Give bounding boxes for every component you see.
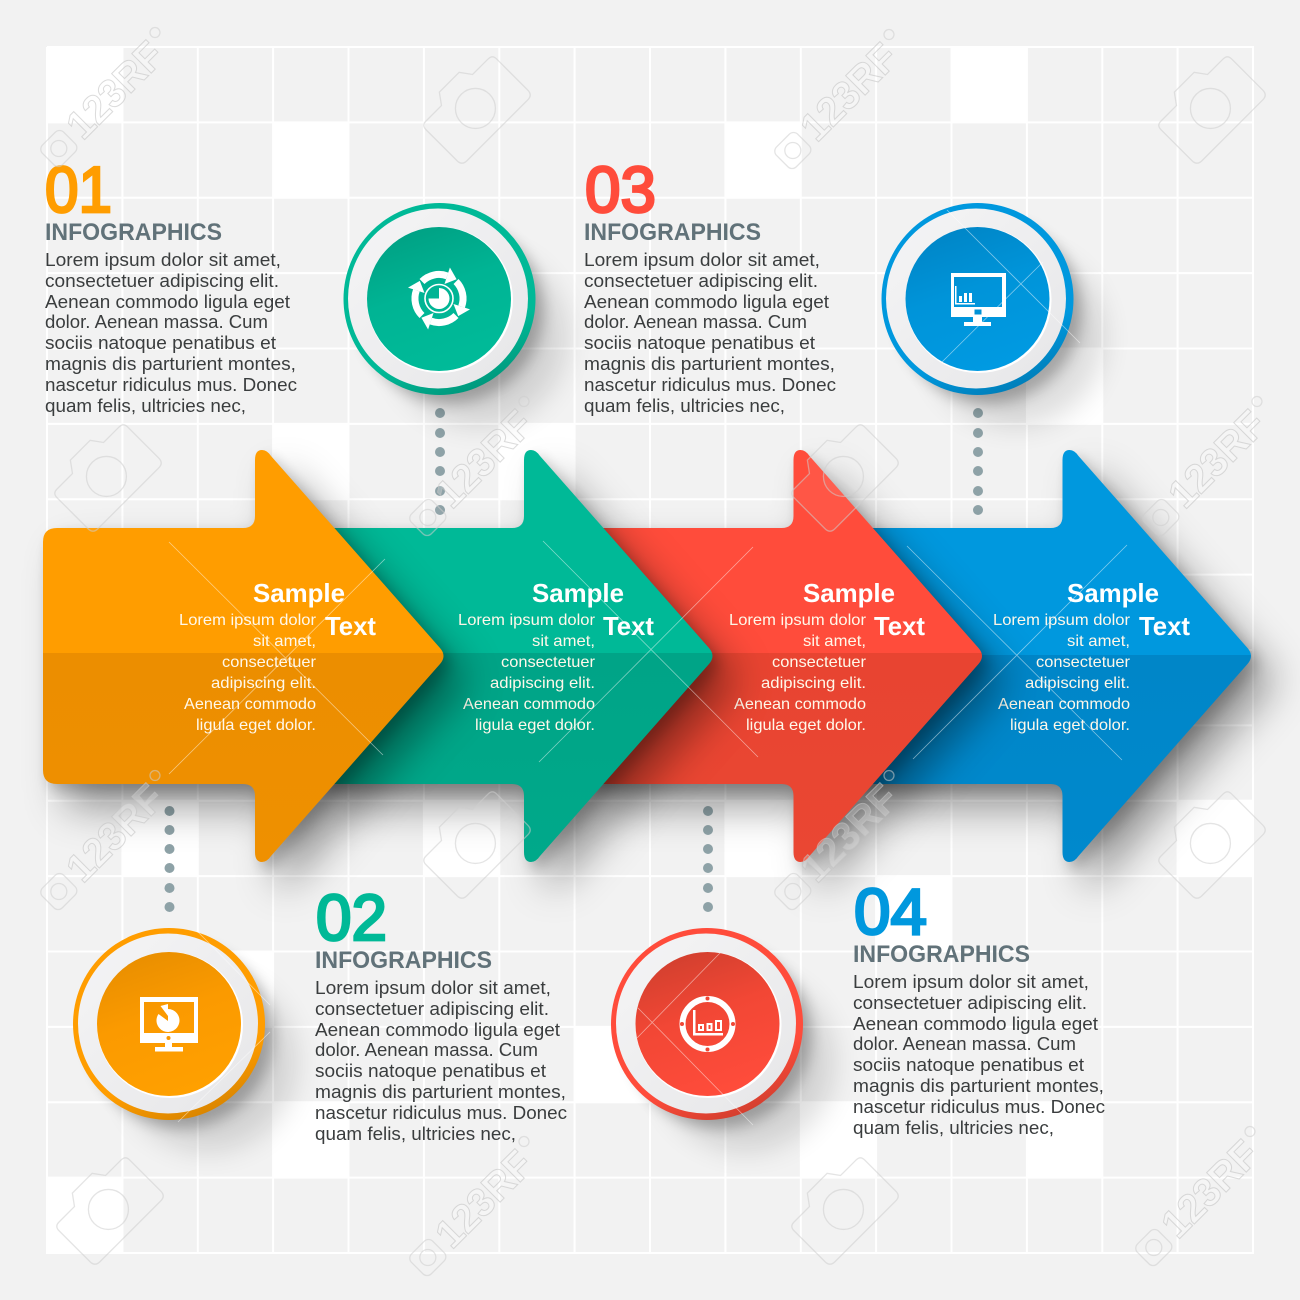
arrow 1 body text: ligula eget dolor. xyxy=(196,717,316,734)
arrow 4: blue xyxy=(850,450,1251,862)
arrow 4 title: Text xyxy=(1139,611,1190,641)
arrow 2 title xyxy=(532,578,654,641)
body text 04: Aenean commodo ligula eget xyxy=(853,1013,1098,1034)
body text 01: dolor. Aenean massa. Cum xyxy=(45,311,268,332)
number 01: 01 xyxy=(45,153,112,226)
arrow 1 body text xyxy=(179,612,317,734)
watermark: 123RF logos: 123RF xyxy=(1153,1132,1268,1247)
arrow 2 title: Sample xyxy=(532,578,624,608)
body text 01: Lorem ipsum dolor sit amet, xyxy=(45,249,281,270)
body text 03: Lorem ipsum dolor sit amet, xyxy=(584,249,820,270)
arrow 2 body text: ligula eget dolor. xyxy=(475,717,595,734)
connector: dotted line 04 xyxy=(703,806,713,912)
arrow 1 title: Text xyxy=(325,611,376,641)
connector: dotted line 01 xyxy=(435,408,445,515)
circle badge: green xyxy=(344,203,566,426)
body text 04: Lorem ipsum dolor sit amet, xyxy=(853,971,1089,992)
arrow 4 title: Sample xyxy=(1067,578,1159,608)
arrow 4 body text xyxy=(993,612,1131,734)
body text 02: dolor. Aenean massa. Cum xyxy=(315,1039,538,1060)
body text 03: quam felis, ultricies nec, xyxy=(584,395,785,416)
body text 03: Aenean commodo ligula eget xyxy=(584,291,829,312)
body text 03: consectetuer adipiscing elit. xyxy=(584,270,818,291)
arrow 4 body text: Lorem ipsum dolor xyxy=(993,612,1131,629)
text block 02 xyxy=(315,881,567,1144)
number 02: 02 xyxy=(316,881,387,954)
body text 01: consectetuer adipiscing elit. xyxy=(45,270,279,291)
body text 02: quam felis, ultricies nec, xyxy=(315,1123,516,1144)
arrow 4 body text: adipiscing elit. xyxy=(1025,675,1130,692)
connector: dotted line 02 xyxy=(164,806,174,912)
body text 04 xyxy=(853,971,1105,1138)
number 03: 03 xyxy=(585,153,656,226)
body text 02 xyxy=(315,977,567,1144)
body text 02: magnis dis parturient montes, xyxy=(315,1081,566,1102)
body text 04: dolor. Aenean massa. Cum xyxy=(853,1033,1076,1054)
body text 02: nascetur ridiculus mus. Donec xyxy=(315,1102,567,1123)
watermark: 123RF logos: 123RF xyxy=(58,776,173,891)
number 04: 04 xyxy=(854,875,927,948)
arrow 3 body text: ligula eget dolor. xyxy=(746,717,866,734)
body text 01 xyxy=(45,249,297,416)
arrow 2 body text: sit amet, xyxy=(532,633,595,650)
text block 03 xyxy=(584,153,836,416)
watermark: 123RF logos: 123RF xyxy=(792,776,907,891)
body text 02: sociis natoque penatibus et xyxy=(315,1060,546,1081)
arrow 2 body text: adipiscing elit. xyxy=(490,675,595,692)
watermark: 123RF logos: 123RF xyxy=(427,1142,542,1257)
arrow 1 body text: Lorem ipsum dolor xyxy=(179,612,317,629)
arrow 1 body text: adipiscing elit. xyxy=(211,675,316,692)
body text 01: Aenean commodo ligula eget xyxy=(45,291,290,312)
circle badge: orange xyxy=(73,928,296,1151)
watermark cross lines on arrows and badges xyxy=(169,210,1127,1125)
body text 04: magnis dis parturient montes, xyxy=(853,1075,1104,1096)
watermark: 123RF logos: 123RF xyxy=(427,402,542,517)
arrow 3: red xyxy=(582,450,982,862)
arrow 2 body text: Aenean commodo xyxy=(463,696,595,713)
icon: target ring with bar chart xyxy=(680,996,735,1052)
body text 04: sociis natoque penatibus et xyxy=(853,1054,1084,1075)
watermark: 123RF logos: 123RF xyxy=(1160,402,1275,517)
arrow 3 body text: consectetuer xyxy=(772,654,867,671)
arrow 3 body text xyxy=(729,612,867,734)
arrow 1: orange xyxy=(43,450,444,862)
arrow 3 body text: adipiscing elit. xyxy=(761,675,866,692)
body text 01: quam felis, ultricies nec, xyxy=(45,395,246,416)
icon: monitor with pie chart xyxy=(140,997,198,1052)
arrow 3 title xyxy=(803,578,925,641)
body text 02: consectetuer adipiscing elit. xyxy=(315,998,549,1019)
arrow 1 body text: consectetuer xyxy=(222,654,317,671)
arrow 2 body text: consectetuer xyxy=(501,654,596,671)
arrow 1 title: Sample xyxy=(253,578,345,608)
body text 03: nascetur ridiculus mus. Donec xyxy=(584,374,836,395)
arrow 4 body text: consectetuer xyxy=(1036,654,1131,671)
watermark: 123RF logos: 123RF xyxy=(792,35,907,150)
text block 01 xyxy=(45,153,297,416)
body text 03: dolor. Aenean massa. Cum xyxy=(584,311,807,332)
arrow 4 body text: Aenean commodo xyxy=(998,696,1130,713)
arrow 4 body text: sit amet, xyxy=(1067,633,1130,650)
body text 03: magnis dis parturient montes, xyxy=(584,353,835,374)
body text 02: Lorem ipsum dolor sit amet, xyxy=(315,977,551,998)
arrow 3 body text: Aenean commodo xyxy=(734,696,866,713)
arrow 4 title xyxy=(1067,578,1190,641)
watermark: 123RF logos: 123RF xyxy=(58,33,173,148)
arrow 4 body text: ligula eget dolor. xyxy=(1010,717,1130,734)
arrow 2 body text: Lorem ipsum dolor xyxy=(458,612,596,629)
arrow 3 body text: sit amet, xyxy=(803,633,866,650)
text block 04 xyxy=(853,875,1105,1138)
body text 02: Aenean commodo ligula eget xyxy=(315,1019,560,1040)
body text 03: sociis natoque penatibus et xyxy=(584,332,815,353)
arrow 3 body text: Lorem ipsum dolor xyxy=(729,612,867,629)
body text 04: consectetuer adipiscing elit. xyxy=(853,992,1087,1013)
heading 03: INFOGRAPHICS xyxy=(584,219,761,246)
arrow 2 body text xyxy=(458,612,596,734)
heading 04: INFOGRAPHICS xyxy=(853,941,1030,968)
body text 01: nascetur ridiculus mus. Donec xyxy=(45,374,297,395)
arrow 1 body text: sit amet, xyxy=(253,633,316,650)
arrow 2: green xyxy=(312,450,712,862)
arrow 3 title: Text xyxy=(874,611,925,641)
body text 03 xyxy=(584,249,836,416)
circle badge: blue xyxy=(882,203,1104,426)
arrow 1 title xyxy=(253,578,376,641)
heading 02: INFOGRAPHICS xyxy=(315,947,492,974)
body text 01: magnis dis parturient montes, xyxy=(45,353,296,374)
body text 01: sociis natoque penatibus et xyxy=(45,332,276,353)
arrow 3 title: Sample xyxy=(803,578,895,608)
heading 01: INFOGRAPHICS xyxy=(45,219,222,246)
body text 04: quam felis, ultricies nec, xyxy=(853,1117,1054,1138)
icon: cycle arrows with pie xyxy=(408,268,470,330)
arrow 2 title: Text xyxy=(603,611,654,641)
circle badge: red xyxy=(611,928,834,1151)
arrow 1 body text: Aenean commodo xyxy=(184,696,316,713)
connector: dotted line 03 xyxy=(973,408,983,515)
body text 04: nascetur ridiculus mus. Donec xyxy=(853,1096,1105,1117)
icon: monitor with bar chart xyxy=(951,273,1006,326)
